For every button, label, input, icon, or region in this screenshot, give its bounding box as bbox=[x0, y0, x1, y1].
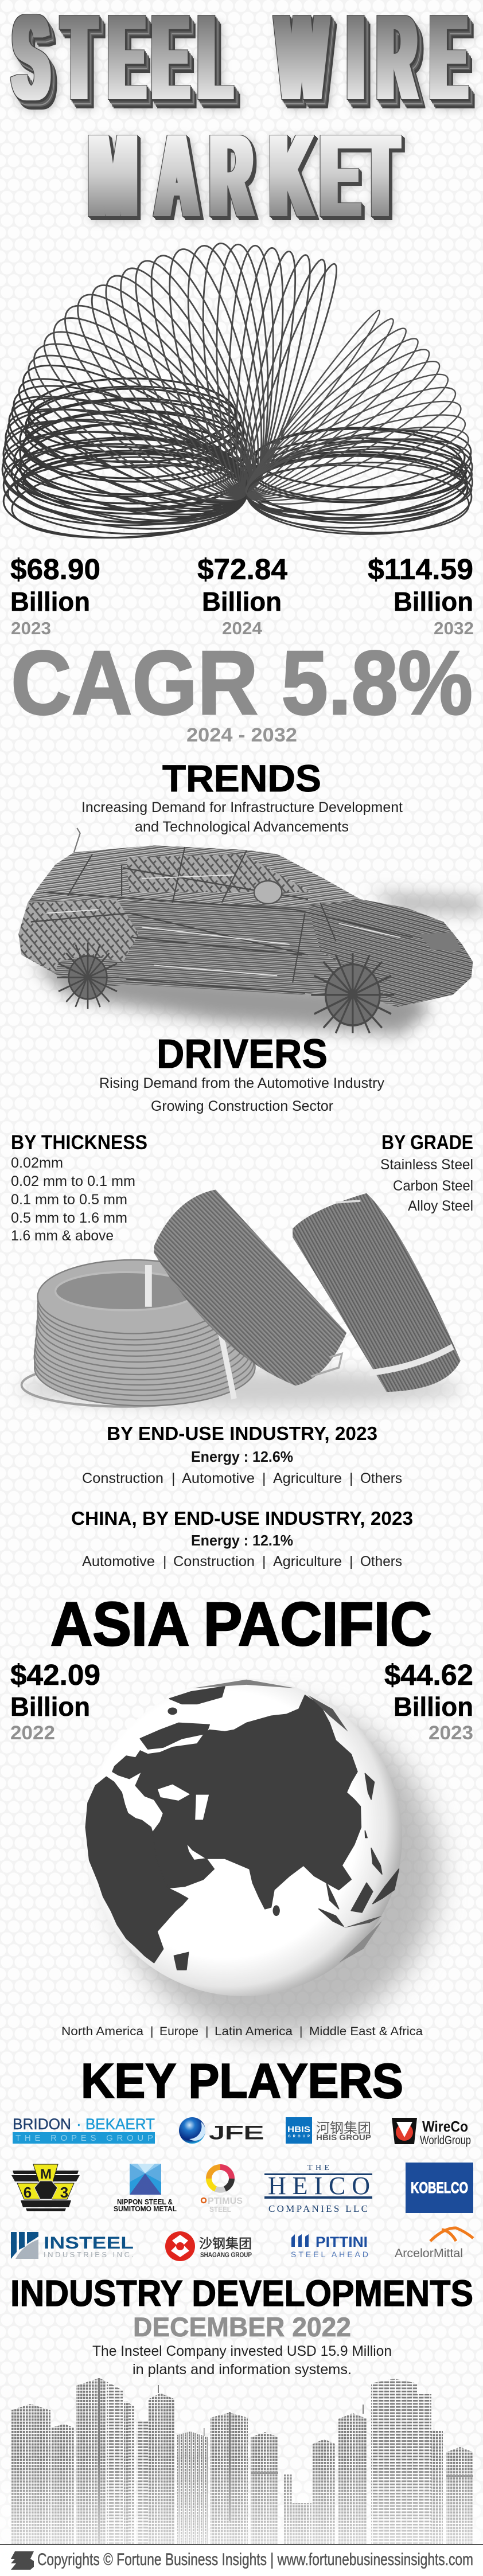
market value: 2023: Billion bbox=[10, 587, 90, 616]
market value: 2032: 2032 bbox=[434, 618, 474, 638]
logo: Nippon Steel & Sumitomo Metal bbox=[114, 2164, 177, 2213]
market value: 2024: Billion bbox=[202, 587, 282, 616]
logo: The Heico Companies: COMPANIES LLC bbox=[268, 2203, 368, 2214]
regional value: 2023: $44.62 bbox=[384, 1658, 473, 1691]
logo: HBIS Group: GROUP bbox=[288, 2135, 310, 2138]
regional value: 2022: Billion bbox=[10, 1692, 90, 1722]
logo: Pittini bbox=[291, 2234, 368, 2259]
segment: by grade: Stainless Steel bbox=[380, 1157, 473, 1173]
market value: 2023: 2023 bbox=[11, 618, 51, 638]
front wheel bbox=[311, 953, 394, 1033]
other regions list: | bbox=[205, 2025, 208, 2038]
segment: by grade bbox=[380, 1131, 473, 1214]
title bbox=[14, 0, 466, 242]
car hood bbox=[308, 899, 473, 1007]
logo: Bridon-Bekaert: BRIDON bbox=[13, 2116, 71, 2133]
regional value: 2023: 2023 bbox=[429, 1722, 473, 1744]
logo: WireCo WorldGroup: WorldGroup bbox=[420, 2134, 471, 2147]
development text bbox=[92, 2343, 392, 2378]
spool shadow bbox=[18, 1369, 462, 1407]
segment: by end-use industry: Construction bbox=[82, 1470, 163, 1486]
logo: HBIS Group: 河钢集团 bbox=[316, 2121, 371, 2136]
logo: 603 bbox=[11, 2164, 80, 2211]
car grille bbox=[419, 932, 462, 951]
segment: China by end-use industry: | bbox=[163, 1554, 166, 1570]
image: car made of wire bbox=[18, 828, 483, 1035]
logo: WireCo WorldGroup: WireCo bbox=[422, 2118, 468, 2135]
market value: 2032 bbox=[368, 553, 474, 638]
logo: Pittini: PITTINI bbox=[315, 2234, 368, 2250]
segment: by end-use industry: Automotive bbox=[182, 1470, 255, 1486]
logo: ArcelorMittal bbox=[395, 2228, 473, 2260]
CAGR period: 2024 - 2032 bbox=[186, 724, 297, 746]
globe with shadow bbox=[84, 1679, 439, 2037]
image: wire spools bbox=[18, 1190, 462, 1407]
other regions list: North America bbox=[61, 2025, 143, 2038]
logo: Pittini: STEEL AHEAD bbox=[291, 2250, 368, 2259]
segment: by thickness: BY THICKNESS bbox=[11, 1131, 147, 1154]
logo: 603: M bbox=[40, 2167, 52, 2182]
regional value: 2022 bbox=[10, 1658, 100, 1744]
logo: WireCo WorldGroup bbox=[392, 2118, 471, 2147]
segment: by thickness: 0.5 mm to 1.6 mm bbox=[11, 1210, 127, 1226]
logo: HBIS Group: HBIS GROUP bbox=[316, 2133, 371, 2142]
car rear section bbox=[18, 899, 139, 972]
trends text: and Technological Advancements bbox=[135, 819, 349, 835]
logo: Insteel Industries bbox=[11, 2232, 134, 2259]
segment: China by end-use industry: Agriculture bbox=[273, 1554, 342, 1570]
footer band bbox=[0, 2544, 483, 2576]
segment: by end-use industry: Agriculture bbox=[273, 1470, 342, 1486]
other regions list: Latin America bbox=[215, 2025, 293, 2038]
regional value: 2022: $42.09 bbox=[10, 1658, 100, 1691]
segment: by end-use industry: Others bbox=[360, 1470, 402, 1486]
image: slinky wire coil bbox=[0, 240, 478, 545]
logo: The Heico Companies: HEICO bbox=[268, 2172, 370, 2200]
illustration: city skyline bbox=[0, 2378, 483, 2544]
segment: by thickness: 0.1 mm to 0.5 mm bbox=[11, 1192, 127, 1208]
market value: 2023: $68.90 bbox=[10, 553, 100, 586]
other regions list: Europe bbox=[159, 2025, 198, 2038]
car body bbox=[18, 845, 473, 1007]
segment: China by end-use industry: Automotive bbox=[82, 1554, 155, 1570]
logo: Optimus Steel: STEEL bbox=[209, 2205, 231, 2214]
segment: China by end-use industry: | bbox=[349, 1554, 353, 1570]
footer logo bbox=[11, 2551, 34, 2570]
right spool bbox=[293, 1193, 461, 1392]
segment: China by end-use industry: | bbox=[262, 1554, 266, 1570]
market value: 2032: $114.59 bbox=[368, 553, 473, 586]
segment: by grade: Alloy Steel bbox=[408, 1198, 473, 1214]
segment: by end-use industry: | bbox=[262, 1470, 266, 1486]
trends text: Increasing Demand for Infrastructure Development bbox=[81, 799, 403, 815]
market value: 2024 bbox=[197, 553, 288, 638]
segment: China by end-use industry: CHINA, BY END-USE INDUSTRY, 2023 bbox=[71, 1508, 413, 1529]
development text: in plants and information systems. bbox=[133, 2362, 352, 2378]
logo: Insteel Industries: INSTEEL bbox=[44, 2234, 134, 2253]
market value: 2024: 2024 bbox=[222, 618, 263, 638]
segment: by end-use industry: | bbox=[172, 1470, 176, 1486]
logo: Optimus Steel: PTIMUS bbox=[208, 2196, 243, 2206]
logo: ArcelorMittal: ArcelorMittal bbox=[395, 2247, 463, 2260]
market value: 2023 bbox=[10, 553, 100, 638]
heading: drivers: DRIVERS bbox=[157, 1032, 328, 1077]
heading: key players: KEY PLAYERS bbox=[81, 2054, 403, 2109]
segment: by grade: Carbon Steel bbox=[393, 1178, 473, 1194]
drivers text bbox=[99, 1075, 384, 1114]
segment: by end-use industry: | bbox=[349, 1470, 353, 1486]
logo: Bridon-Bekaert bbox=[13, 2116, 155, 2144]
market value: 2032: Billion bbox=[394, 587, 473, 616]
segment: by thickness bbox=[11, 1131, 147, 1244]
segment: China by end-use industry: Others bbox=[360, 1554, 402, 1570]
loose wires across the car bbox=[31, 847, 413, 993]
logo: Insteel Industries: INDUSTRIES INC. bbox=[44, 2250, 134, 2259]
logo: Nippon Steel & Sumitomo Metal: NIPPON STEEL & bbox=[117, 2198, 173, 2206]
development date: DECEMBER 2022 bbox=[133, 2312, 351, 2342]
logo: JFE: JFE bbox=[209, 2122, 264, 2143]
regional value: 2022: 2022 bbox=[10, 1722, 55, 1744]
rear wheel bbox=[57, 943, 119, 1009]
regional value: 2023: Billion bbox=[394, 1692, 473, 1722]
heading: trends: TRENDS bbox=[162, 757, 321, 799]
logo: 603: 3 bbox=[60, 2184, 68, 2201]
regional value: 2023 bbox=[384, 1658, 473, 1744]
logo: Bridon-Bekaert: THE ROPES GROUP bbox=[15, 2133, 153, 2143]
segment: by end-use industry: Energy : 12.6% bbox=[191, 1448, 293, 1465]
middle spool bbox=[154, 1190, 346, 1385]
segment: by end-use industry: BY END-USE INDUSTRY, 2023 bbox=[107, 1423, 377, 1444]
logo: Kobelco bbox=[406, 2163, 473, 2213]
left spool bbox=[22, 1260, 255, 1407]
logo: HBIS Group: HBIS bbox=[287, 2125, 310, 2134]
logo: Shagang Group: 沙钢集团 bbox=[199, 2236, 252, 2251]
logo: JFE bbox=[179, 2117, 264, 2144]
segment: by thickness: 1.6 mm & above bbox=[11, 1228, 114, 1244]
drivers text: Rising Demand from the Automotive Industry bbox=[99, 1075, 384, 1091]
other regions list: Middle East & Africa bbox=[309, 2025, 423, 2038]
logo: The Heico Companies: THE bbox=[307, 2164, 329, 2172]
heading: Asia Pacific: ASIA PACIFIC bbox=[50, 1589, 432, 1658]
logo: Bridon-Bekaert: · BEKAERT bbox=[76, 2116, 155, 2133]
title line: MARKET: MARKET bbox=[89, 110, 398, 242]
segment: China by end-use industry: Construction bbox=[173, 1554, 255, 1570]
segment: by thickness: 0.02 mm to 0.1 mm bbox=[11, 1173, 135, 1189]
car mirror bbox=[254, 881, 282, 904]
logo: Shagang Group: SHAGANG GROUP bbox=[200, 2251, 252, 2259]
other regions list bbox=[61, 2025, 423, 2038]
development text: The Insteel Company invested USD 15.9 Million bbox=[92, 2343, 392, 2359]
segment: by end-use industry bbox=[82, 1423, 402, 1486]
car roof and windows bbox=[31, 845, 360, 906]
market value: 2024: $72.84 bbox=[197, 553, 288, 586]
globe land masses bbox=[85, 1680, 399, 1970]
logo: 603: 6 bbox=[24, 2184, 32, 2201]
trends text bbox=[81, 799, 403, 835]
other regions list: | bbox=[150, 2025, 153, 2038]
segment: China by end-use industry bbox=[71, 1508, 413, 1570]
segment: China by end-use industry: Energy : 12.1% bbox=[191, 1532, 293, 1549]
logo: The Heico Companies bbox=[264, 2164, 372, 2214]
other regions list: | bbox=[299, 2025, 302, 2038]
drivers text: Growing Construction Sector bbox=[151, 1098, 333, 1114]
logo: HBIS Group bbox=[286, 2117, 371, 2144]
logo: Nippon Steel & Sumitomo Metal: SUMITOMO METAL bbox=[114, 2204, 177, 2213]
segment: by thickness: 0.02mm bbox=[11, 1155, 63, 1171]
car ground shadows bbox=[31, 892, 483, 1035]
logo: Shagang Group bbox=[165, 2231, 252, 2261]
logo: Optimus Steel bbox=[201, 2167, 243, 2214]
